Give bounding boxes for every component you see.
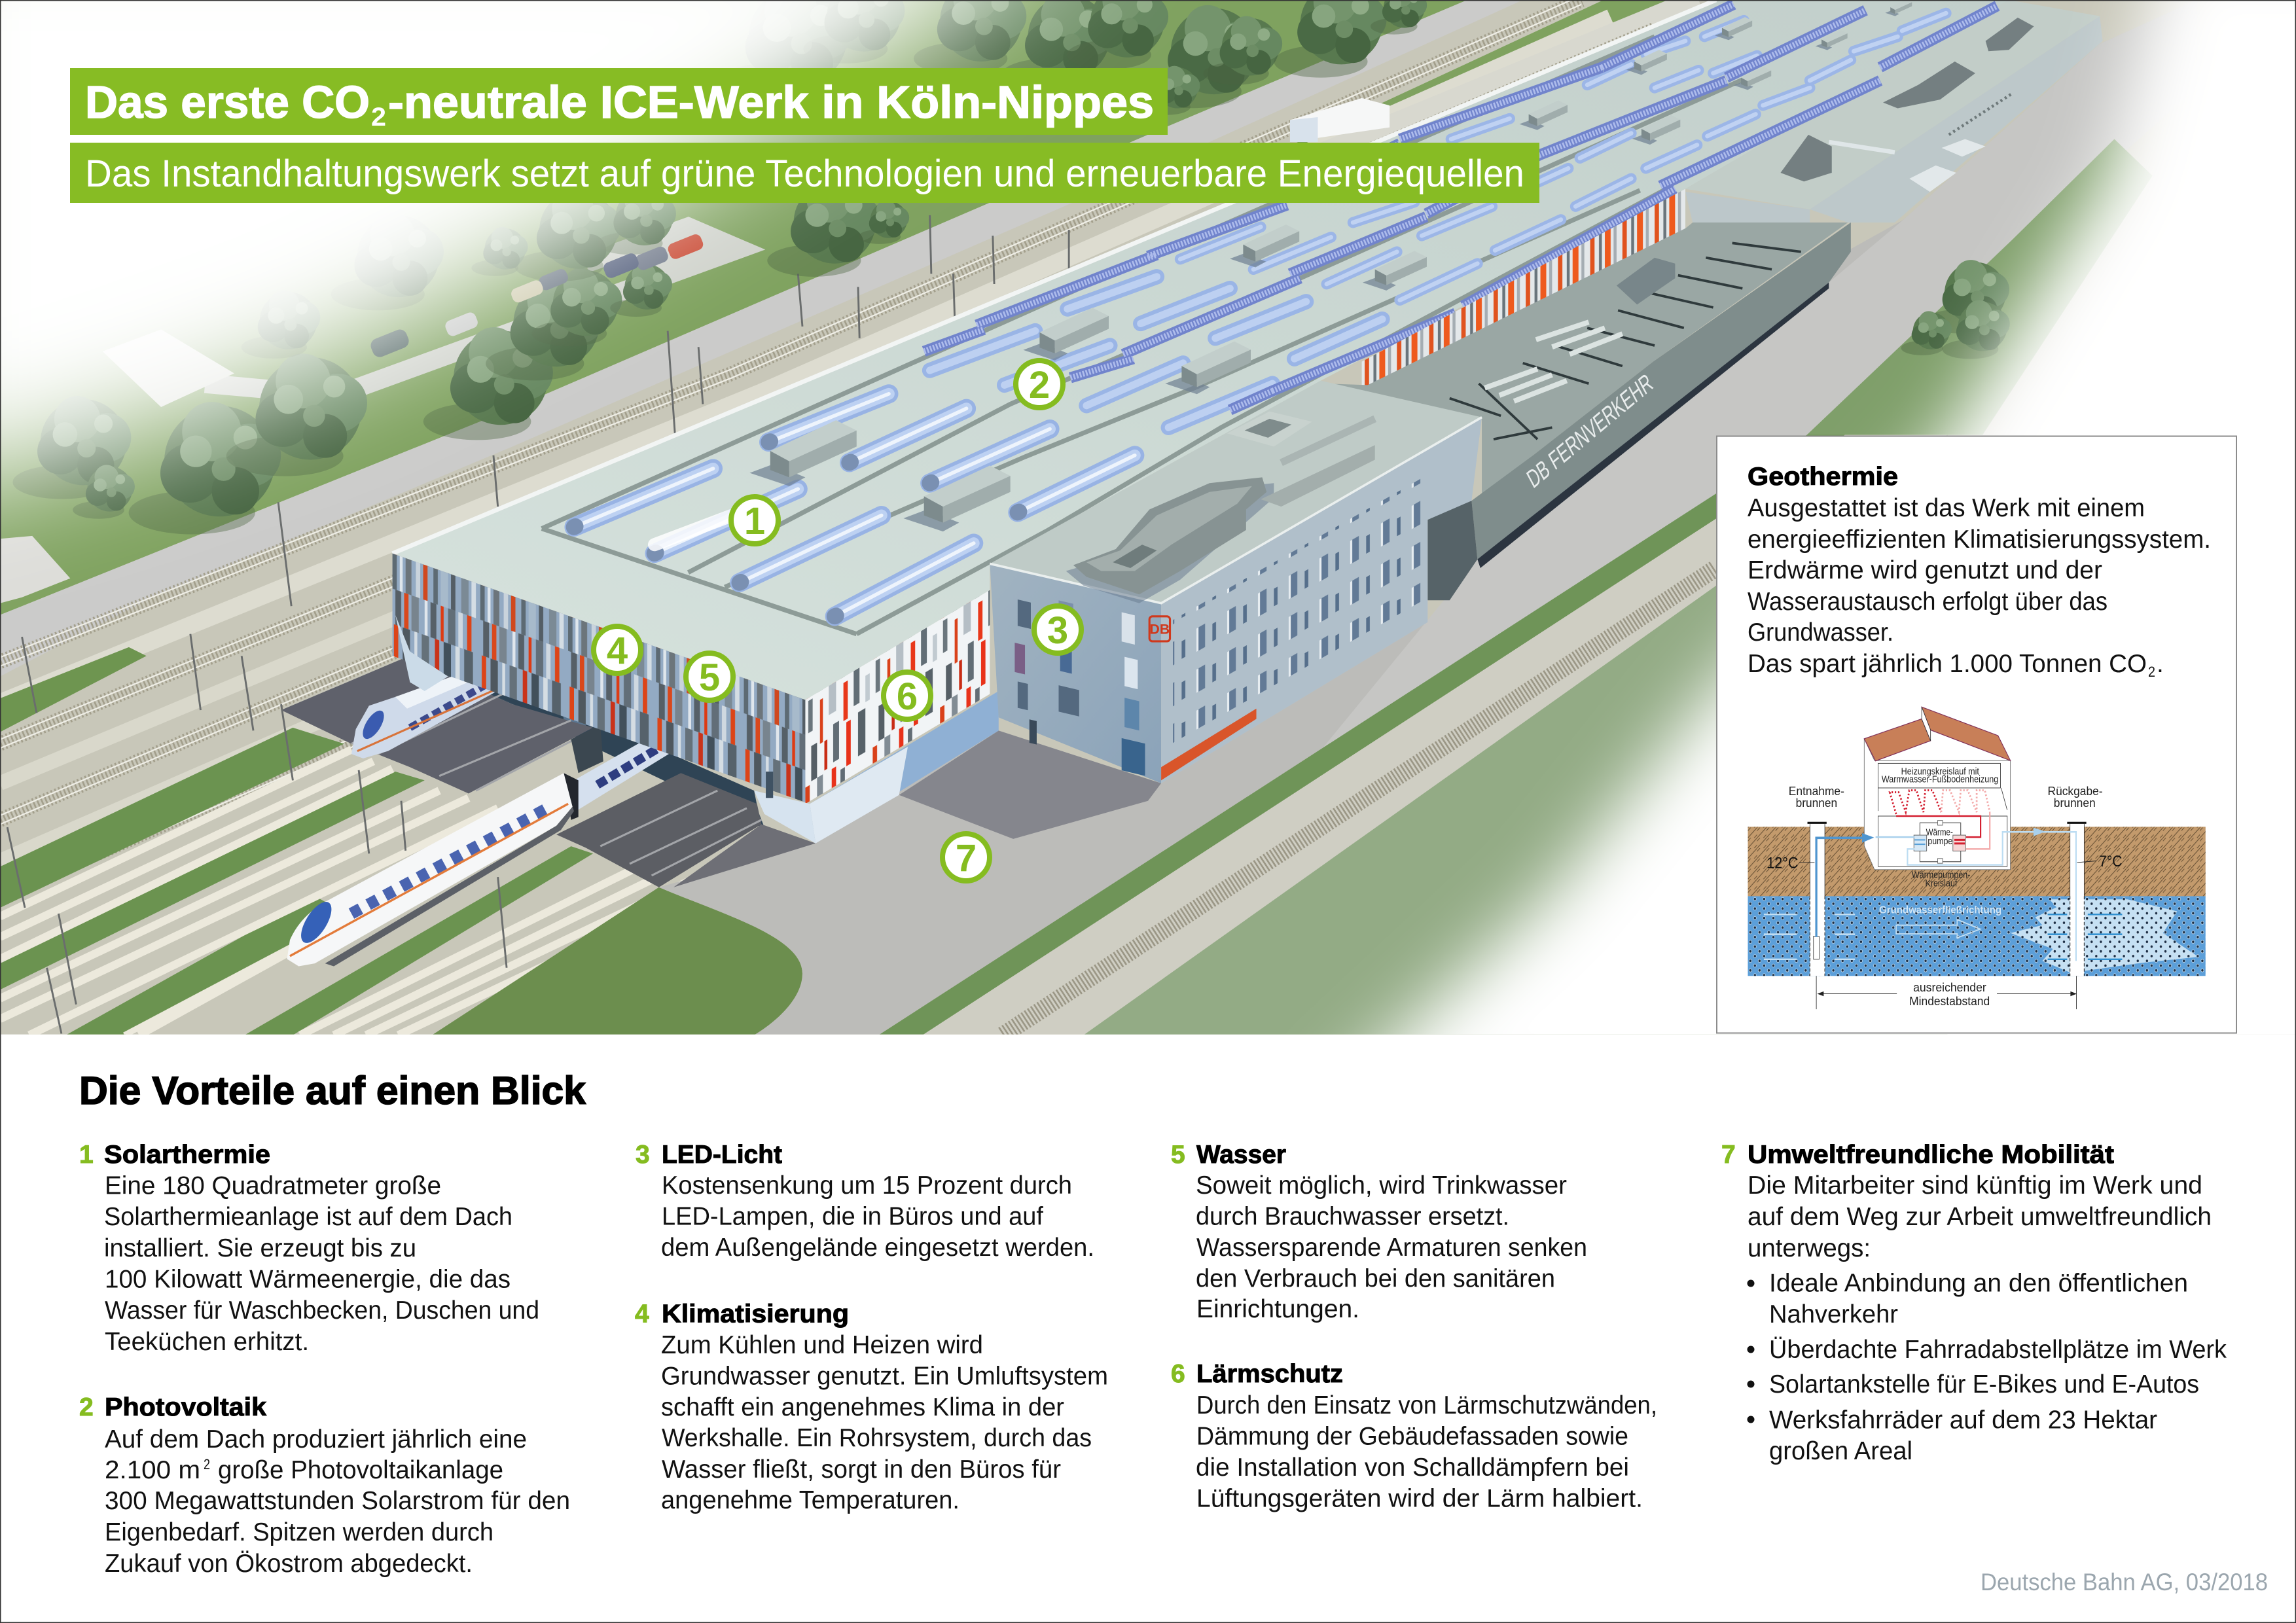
item 1: Solarthermie: Eine 180 Quadratmeter große [105, 1171, 441, 1200]
item 7: Umweltfreundliche Mobilität [1721, 1141, 2227, 1465]
item 4: Klimatisierung: Zum Kühlen und Heizen wird [661, 1331, 983, 1359]
skylights: solar thermal and glazing [574, 13, 1946, 616]
item 2: Photovoltaik: Photovoltaik [105, 1393, 266, 1421]
hall roof light edge [393, 0, 1716, 554]
Geothermie text [1748, 494, 2211, 680]
item 7: Umweltfreundliche Mobilität: Werksfahrräder auf dem 23 Hektar [1769, 1406, 2157, 1435]
item 1: Solarthermie: 100 Kilowatt Wärmeenergie, die das [105, 1266, 511, 1293]
item 3: LED-Licht [636, 1141, 1094, 1262]
marker 6 [884, 672, 931, 719]
Geothermie text: energieeffizienten Klimatisierungssystem. [1748, 526, 2211, 554]
diagram labels: 7°C [2099, 852, 2122, 870]
title bar: -neutrale ICE-Werk in Köln-Nippes [388, 77, 1154, 128]
item 1: Solarthermie: Wasser für Waschbecken, Duschen und [105, 1296, 539, 1325]
building shadow on plaza [899, 730, 1161, 839]
DB logo: DB [1150, 622, 1170, 637]
item 3: LED-Licht: 3 [636, 1141, 650, 1169]
item 4: Klimatisierung: angenehme Temperaturen. [661, 1486, 960, 1514]
item 2: Photovoltaik: 2 [79, 1393, 94, 1421]
item 7: Umweltfreundliche Mobilität: Ideale Anbindung an den öffentlichen [1769, 1270, 2188, 1297]
lettering: DB FERNVERKEHR: DB FERNVERKEHR [1522, 368, 1657, 493]
roof dividing bands [542, 37, 1757, 634]
diagram labels: pumpe [1928, 836, 1953, 846]
office rooftop ductwork [1066, 412, 1375, 603]
item 6: Lärmschutz: 6 [1171, 1360, 1185, 1388]
item 1: Solarthermie: installiert. Sie erzeugt bis zu [104, 1234, 416, 1262]
diagram labels [1767, 766, 2122, 1008]
marker 7 [942, 834, 990, 881]
geothermal heat pump diagram [1748, 707, 2206, 1009]
Geothermie heading: Geothermie [1748, 463, 1898, 491]
item 6: Lärmschutz: Durch den Einsatz von Lärmschutzwänden, [1196, 1391, 1657, 1419]
subtitle bar [70, 143, 1539, 203]
diagram labels: Grundwasserfließrichtung [1879, 904, 2001, 916]
item 7: Umweltfreundliche Mobilität: 7 [1721, 1141, 1736, 1169]
diagram labels: Wärmepumpen- [1912, 870, 1970, 880]
marker 2 [1016, 361, 1063, 408]
far end of hall roof [1685, 0, 2103, 239]
fog: white fade right side [1318, 0, 2296, 1113]
item 7: Umweltfreundliche Mobilität: großen Areal [1769, 1437, 1912, 1465]
title bar: Das erste CO [85, 77, 370, 128]
diagram labels: Wärme- [1926, 827, 1953, 838]
item 2: Photovoltaik: große Photovoltaikanlage [218, 1456, 503, 1484]
office right facade windows [1173, 478, 1422, 743]
marker 7: 7 [956, 837, 977, 880]
diagram labels: Mindestabstand [1909, 994, 1990, 1008]
item 1: Solarthermie: Solarthermieanlage ist auf dem Dach [104, 1203, 512, 1231]
diagram labels: brunnen [1796, 796, 1837, 810]
item 6: Lärmschutz: Lärmschutz [1196, 1360, 1343, 1388]
Geothermie text: . [2157, 650, 2164, 678]
item 5: Wasser: Einrichtungen. [1196, 1295, 1359, 1323]
marker 1: 1 [744, 500, 765, 543]
item 2: Photovoltaik [79, 1393, 570, 1578]
item 6: Lärmschutz: die Installation von Schalldämpfern bei [1196, 1454, 1629, 1482]
soil layer [1748, 827, 2206, 896]
item 4: Klimatisierung: Klimatisierung [662, 1300, 849, 1329]
item 7: Umweltfreundliche Mobilität: Solartankstelle für E-Bikes und E-Autos [1769, 1370, 2199, 1399]
catenary poles [7, 215, 1069, 1033]
item 1: Solarthermie: Teeküchen erhitzt. [105, 1328, 309, 1356]
short green strip by the tracks [0, 647, 147, 732]
item 7: Umweltfreundliche Mobilität: Umweltfreundliche Mobilität [1748, 1141, 2114, 1169]
rail tracks behind hall [0, 0, 1698, 901]
Geothermie text: 2 [2148, 664, 2155, 680]
subtitle bar: Das Instandhaltungswerk setzt auf grüne Technologien und erneuerbare Energiequellen [85, 152, 1524, 195]
item 3: LED-Licht: LED-Lampen, die in Büros und auf [662, 1203, 1043, 1230]
item 7: Umweltfreundliche Mobilität: Nahverkehr [1769, 1300, 1898, 1329]
title bar: 2 [371, 103, 386, 132]
illustration: aerial view of the ICE plant [0, 0, 2296, 1113]
Geothermie text: Ausgestattet ist das Werk mit einem [1748, 494, 2145, 522]
DB logo [1149, 616, 1170, 641]
marker 4 [594, 626, 641, 673]
marker 6: 6 [897, 675, 918, 718]
marker 4: 4 [607, 630, 628, 672]
lawn strips between front tracks [0, 728, 593, 1035]
item 2: Photovoltaik: 300 Megawattstunden Solarstrom für den [105, 1487, 570, 1515]
annex side wall [1427, 223, 1851, 600]
trees and parked cars [12, 0, 2010, 534]
underfloor heating coils [1890, 791, 1990, 814]
groundwater layer [1748, 896, 2206, 976]
white trailer [1290, 98, 1390, 142]
item 2: Photovoltaik: Auf dem Dach produziert jährlich eine [105, 1425, 527, 1454]
rear ICE train [351, 658, 505, 758]
item 2: Photovoltaik: Zukauf von Ökostrom abgedeckt. [105, 1550, 473, 1578]
diagram labels: ausreichender [1913, 980, 1986, 994]
diagram labels: Heizungskreislauf mit [1901, 766, 1979, 777]
item 4: Klimatisierung: Wasser fließt, sorgt in den Büros für [662, 1455, 1061, 1484]
front tracks [0, 749, 710, 1035]
fog: white fade upper left [0, 0, 1113, 512]
item 5: Wasser: Wassersparende Armaturen senken [1196, 1234, 1587, 1262]
panel: Geothermie [1717, 436, 2236, 1033]
hall lower walls [395, 615, 999, 844]
lawn: upper left with parking [0, 0, 1698, 677]
item 4: Klimatisierung: Werkshalle. Ein Rohrsystem, durch das [662, 1424, 1092, 1452]
diagram labels: 12°C [1767, 853, 1798, 872]
diagram labels: Entnahme- [1789, 784, 1844, 798]
office front facade windows [1014, 587, 1145, 776]
plaza and service road [659, 0, 2197, 1035]
annex roof with dark ribs [1325, 223, 1848, 495]
marker 5: 5 [699, 656, 720, 699]
heat pump circuit [1816, 812, 2076, 961]
diagram labels: Kreislauf [1926, 878, 1957, 888]
front ICE train [287, 724, 673, 967]
item 4: Klimatisierung: Grundwasser genutzt. Ein Umluftsystem [661, 1363, 1108, 1390]
item 3: LED-Licht: dem Außengelände eingesetzt werden. [661, 1234, 1094, 1262]
item 6: Lärmschutz: Dämmung der Gebäudefassaden sowie [1196, 1423, 1628, 1450]
road lawn and side track lower right [878, 139, 2153, 1035]
item 3: LED-Licht: LED-Licht [662, 1141, 782, 1169]
Geothermie text: Das spart jährlich 1.000 Tonnen CO [1748, 650, 2147, 678]
item 2: Photovoltaik: Eigenbedarf. Spitzen werden durch [105, 1518, 493, 1546]
item 7: Umweltfreundliche Mobilität: Überdachte Fahrradabstellplätze im Werk [1769, 1336, 2227, 1364]
Geothermie text: Grundwasser. [1748, 618, 1893, 647]
title bar [70, 68, 1168, 135]
item 5: Wasser [1171, 1141, 1587, 1323]
main hall roof [393, 0, 2009, 700]
wells [1808, 823, 2087, 976]
item 5: Wasser: Wasser [1196, 1141, 1286, 1169]
item 7: Umweltfreundliche Mobilität: Die Mitarbeiter sind künftig im Werk und [1748, 1171, 2202, 1200]
hall facade right with colour stripes [805, 590, 990, 804]
diagram labels: Rückgabe- [2048, 784, 2103, 798]
photovoltaic strips [924, 5, 1998, 410]
item 4: Klimatisierung: schafft ein angenehmes Klima in der [661, 1393, 1064, 1421]
item 3: LED-Licht: Kostensenkung um 15 Prozent durch [662, 1171, 1072, 1200]
item 1: Solarthermie: Solarthermie [104, 1141, 270, 1169]
item 7: Umweltfreundliche Mobilität: auf dem Weg zur Arbeit umweltfreundlich [1748, 1203, 2212, 1231]
marker 3 [1034, 606, 1081, 653]
portal dark interior [406, 652, 764, 827]
item 5: Wasser: durch Brauchwasser ersetzt. [1196, 1203, 1509, 1230]
marker 1 [731, 497, 778, 544]
marker 2: 2 [1029, 364, 1050, 406]
item 1: Solarthermie: 1 [79, 1141, 94, 1169]
heading: Die Vorteile auf einen Blick: Die Vorteile auf einen Blick [79, 1069, 586, 1113]
marker 5 [686, 653, 733, 700]
item 2: Photovoltaik: 2 [204, 1456, 210, 1472]
item 4: Klimatisierung: 4 [635, 1300, 649, 1329]
item 4: Klimatisierung [635, 1300, 1108, 1514]
marker 3: 3 [1047, 609, 1068, 652]
house [1864, 707, 2011, 870]
office building [990, 381, 1482, 783]
item 5: Wasser: Soweit möglich, wird Trinkwasser [1196, 1171, 1567, 1200]
diagram labels: Warmwasser-Fußbodenheizung [1882, 774, 1998, 785]
item 6: Lärmschutz: Lüftungsgeräten wird der Lärm halbiert. [1196, 1484, 1643, 1513]
minimum distance dimension [1816, 976, 2076, 1009]
source credit: Deutsche Bahn AG, 03/2018 [1981, 1569, 2268, 1596]
back wall with orange stripes [1362, 189, 1685, 401]
hall facade left with colour stripes [393, 554, 805, 802]
item 1: Solarthermie [79, 1141, 539, 1356]
item 5: Wasser: den Verbrauch bei den sanitären [1196, 1264, 1555, 1293]
Geothermie text: Wasseraustausch erfolgt über das [1748, 588, 2108, 616]
item 6: Lärmschutz [1171, 1360, 1657, 1513]
item 7: Umweltfreundliche Mobilität: unterwegs: [1748, 1234, 1871, 1262]
Geothermie text: Erdwärme wird genutzt und der [1748, 556, 2102, 584]
portal ramps [281, 658, 816, 887]
big lawn in front [432, 887, 802, 1035]
item 5: Wasser: 5 [1171, 1141, 1185, 1169]
well flow arrows [1764, 828, 2122, 959]
rooftop vent boxes [749, 0, 1912, 531]
diagram labels: brunnen [2054, 796, 2096, 810]
track bed ground [0, 0, 2296, 1035]
item 2: Photovoltaik: 2.100 m [105, 1456, 200, 1484]
